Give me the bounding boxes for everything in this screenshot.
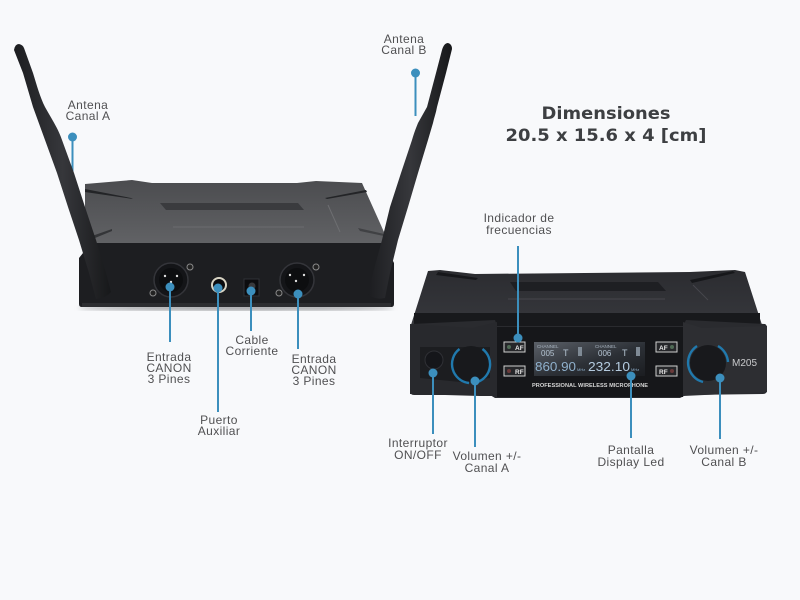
- AF right button: AF: [659, 345, 668, 352]
- callout: puerto auxiliar: Auxiliar: [198, 424, 240, 438]
- AF left button: [504, 342, 525, 352]
- callout: puerto auxiliar: Puerto: [200, 413, 238, 427]
- callout: pantalla display led: Pantalla: [608, 443, 654, 457]
- callout: puerto auxiliar: [198, 284, 240, 438]
- RF right button: [656, 366, 677, 376]
- LED display: CHANNEL: [537, 344, 559, 349]
- antenna A line: [68, 132, 77, 178]
- XLR connector left: [150, 263, 193, 297]
- label: antena canal B: Antena: [384, 32, 424, 46]
- label: antena canal A: Canal A: [66, 109, 110, 123]
- callout: interruptor: [388, 368, 448, 462]
- rear top cover: [85, 180, 392, 246]
- callout: entrada canon right: [291, 290, 337, 388]
- callout: indicador de frecuencias: Indicador de: [484, 211, 554, 225]
- callout: indicador de frecuencias: [484, 211, 554, 342]
- device: rear view of receiver: [78, 180, 394, 310]
- LED display: 860.90: [535, 359, 576, 374]
- XLR connector right: [276, 263, 319, 297]
- callout: entrada canon left: Entrada: [147, 350, 191, 364]
- title: dimensions: 20.5 x 15.6 x 4 [cm]: [506, 126, 706, 146]
- LED display: [534, 342, 645, 376]
- power socket: [244, 279, 259, 296]
- volume knob A: [452, 346, 490, 383]
- callout: cable corriente: [226, 286, 278, 358]
- model label: M205: [732, 358, 757, 369]
- callout: entrada canon left: [146, 282, 192, 386]
- callout: volumen canal B: [690, 374, 758, 469]
- callout: interruptor: Interruptor: [388, 436, 448, 450]
- antenna B: [368, 43, 452, 299]
- LED display: CHANNEL: [595, 344, 617, 349]
- auxiliary port: [212, 278, 226, 292]
- callout: indicador de frecuencias: frecuencias: [486, 223, 552, 237]
- callout: pantalla display led: Display Led: [597, 455, 665, 469]
- callout: interruptor: ON/OFF: [394, 448, 442, 462]
- volume knob B: [688, 345, 728, 382]
- title: dimensions: Dimensiones: [542, 104, 670, 124]
- callout: volumen canal A: [453, 376, 521, 475]
- callout: volumen canal A: Volumen +/-: [453, 449, 521, 463]
- callout: entrada canon right: Entrada: [292, 352, 336, 366]
- callout: cable corriente: Cable: [235, 333, 269, 347]
- callout: entrada canon right: 3 Pines: [293, 374, 335, 388]
- LED display: 005: [541, 349, 555, 358]
- LED display: 232.10: [588, 359, 630, 374]
- AF left button: AF: [515, 345, 524, 352]
- RF left button: RF: [515, 369, 524, 376]
- antenna A: [14, 44, 111, 299]
- front top cover: [410, 270, 763, 328]
- LED display: MHz: [577, 367, 585, 372]
- callout: cable corriente: Corriente: [226, 344, 278, 358]
- label: antena canal B: Canal B: [381, 43, 427, 57]
- callout: volumen canal B: Canal B: [701, 455, 747, 469]
- callout: entrada canon left: CANON: [146, 361, 192, 375]
- RF right button: RF: [659, 369, 668, 376]
- callout: entrada canon left: 3 Pines: [148, 372, 190, 386]
- LED display: 006: [598, 349, 612, 358]
- LED display: T: [563, 348, 569, 358]
- rear panel: [79, 243, 394, 307]
- callout: entrada canon right: CANON: [291, 363, 337, 377]
- antenna B line: [411, 68, 420, 116]
- title: dimensions: [506, 104, 706, 146]
- device: front view of receiver: [410, 270, 767, 398]
- RF left button: [504, 366, 525, 376]
- LED display: T: [622, 348, 628, 358]
- callout: volumen canal B: Volumen +/-: [690, 443, 758, 457]
- brand strip: PROFESSIONAL WIRELESS MICROPHONE: [532, 383, 648, 389]
- callout: pantalla display led: [597, 372, 665, 469]
- callout: volumen canal A: Canal A: [465, 461, 509, 475]
- label: antena canal A: Antena: [68, 98, 108, 112]
- LED display: MHz: [631, 367, 639, 372]
- front panel: [410, 320, 767, 398]
- power switch: [425, 351, 443, 369]
- AF right button: [656, 342, 677, 352]
